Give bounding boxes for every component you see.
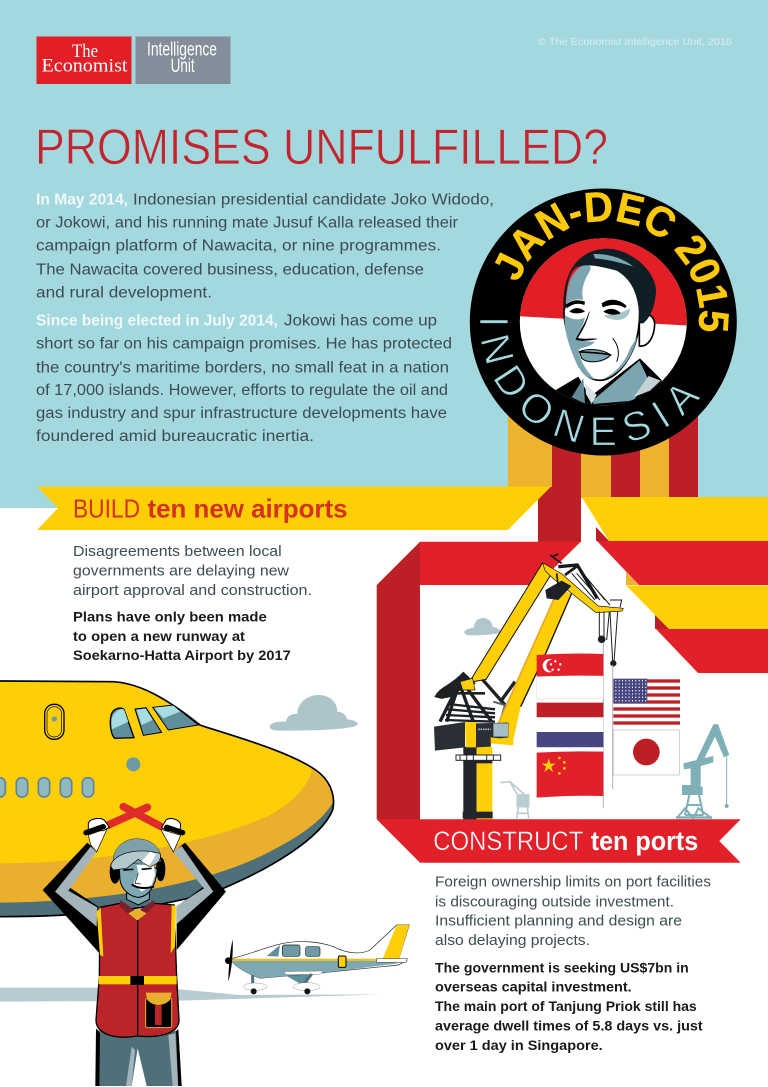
crane column bbox=[456, 747, 501, 820]
logo: The Economist Intelligence Unit: The bbox=[72, 41, 98, 62]
arms bbox=[43, 843, 101, 955]
logo: The Economist Intelligence Unit: Economist bbox=[42, 56, 128, 77]
intro text block: and rural development. bbox=[36, 284, 212, 301]
badge: Jan-Dec 2015 Indonesia portrait: JAN-DEC 2015 bbox=[494, 192, 729, 332]
logo: The Economist Intelligence Unit: Unit bbox=[171, 56, 195, 77]
banner: BUILD ten new airports bbox=[37, 486, 551, 530]
airport text block: Soekarno-Hatta Airport by 2017 bbox=[73, 647, 291, 663]
illustration: port crane, flags and small cranes bbox=[434, 554, 729, 820]
cockpit windows bbox=[110, 708, 134, 738]
crane lattice head bbox=[550, 554, 622, 607]
crane boom arms bbox=[460, 563, 623, 740]
head and hands bbox=[86, 807, 183, 905]
flag: Singapore bbox=[537, 654, 603, 699]
intro text block: campaign platform of Nawacita, or nine programmes. bbox=[36, 238, 441, 255]
safety vest bbox=[96, 903, 179, 1037]
cabin windows bbox=[0, 778, 94, 797]
port frame: red fold bbox=[377, 542, 581, 830]
large yellow airliner bbox=[0, 681, 334, 917]
intro text block: short so far on his campaign promises. He has protected bbox=[36, 335, 452, 352]
port text block: over 1 day in Singapore. bbox=[435, 1037, 603, 1053]
badge: Jan-Dec 2015 Indonesia portrait bbox=[470, 188, 737, 456]
logo: The Economist Intelligence Unit bbox=[36, 36, 230, 84]
intro text block bbox=[36, 191, 494, 445]
neck bbox=[127, 890, 149, 905]
flag: Thailand bbox=[537, 703, 603, 752]
banner: BUILD ten new airports: BUILD bbox=[73, 494, 140, 524]
trousers bbox=[97, 1029, 182, 1086]
vest pocket bbox=[146, 993, 172, 1028]
curved text: JAN-DEC 2015 bbox=[518, 221, 699, 346]
port text block: The main port of Tanjung Priok still has bbox=[435, 998, 697, 1014]
intro text block: the country's maritime borders, no small feat in a nation bbox=[36, 359, 449, 376]
folded stripes: right side bbox=[582, 497, 768, 673]
portrait of Jokowi bbox=[550, 249, 662, 413]
hanging ribbon stripes bbox=[508, 400, 698, 542]
title: PROMISES UNFULFILLED? bbox=[35, 119, 608, 175]
ground shadow bbox=[0, 988, 383, 1002]
logo: The Economist Intelligence Unit: Intelligence bbox=[147, 40, 217, 61]
icon: teal distant crane bbox=[676, 724, 729, 819]
port text block bbox=[435, 875, 711, 1053]
marshaller figure bbox=[43, 807, 226, 1086]
banner: CONSTRUCT ten ports: ten ports bbox=[591, 826, 698, 856]
icon: cloud bbox=[270, 695, 358, 731]
port text block: average dwell times of 5.8 days vs. just bbox=[435, 1018, 703, 1034]
intro text block: Since being elected in July 2014, bbox=[36, 312, 278, 329]
flag: Japan bbox=[613, 730, 679, 775]
port text block: Foreign ownership limits on port facilities bbox=[435, 875, 711, 891]
marshalling sticks bbox=[108, 807, 160, 826]
intro text block: or Jokowi, and his running mate Jusuf Kalla released their bbox=[36, 215, 458, 232]
flag poles bbox=[603, 643, 613, 808]
gloves bbox=[88, 828, 107, 852]
crane lattice and counterweight bbox=[435, 672, 515, 722]
icon: pale distant crane bbox=[501, 782, 529, 818]
banner: BUILD ten new airports: ten new airports bbox=[148, 494, 348, 524]
port text block: The government is seeking US$7bn in bbox=[435, 959, 689, 975]
intro text block: foundered amid bureaucratic inertia. bbox=[36, 428, 314, 445]
port text block: is discouraging outside investment. bbox=[435, 895, 674, 911]
airport text block: Disagreements between local bbox=[73, 544, 282, 560]
curved text: INDONESIA bbox=[480, 316, 699, 445]
airport text block: Plans have only been made bbox=[73, 609, 267, 625]
banner: CONSTRUCT ten ports bbox=[377, 819, 741, 863]
flag: China bbox=[537, 751, 603, 798]
helmet bbox=[113, 839, 161, 865]
airport text block: governments are delaying new bbox=[73, 563, 290, 579]
port text block: overseas capital investment. bbox=[435, 979, 632, 995]
intro text block: gas industry and spur infrastructure developments have bbox=[36, 405, 447, 422]
port crane bbox=[434, 554, 623, 820]
intro text block: Jokowi has come up bbox=[284, 312, 437, 329]
badge: Jan-Dec 2015 Indonesia portrait: INDONESIA bbox=[480, 320, 700, 445]
door bbox=[45, 704, 64, 739]
intro text block: The Nawacita covered business, education, defense bbox=[36, 261, 424, 278]
flag: United States bbox=[613, 679, 680, 725]
crane hoist cables bbox=[598, 612, 618, 666]
intro text block: Indonesian presidential candidate Joko Widodo, bbox=[133, 191, 494, 208]
crane cabin bbox=[434, 722, 513, 751]
intro text block: of 17,000 islands. However, efforts to regulate the oil and bbox=[36, 382, 448, 399]
ear pads bbox=[110, 860, 120, 884]
port text block: Insufficient planning and design are bbox=[435, 914, 682, 930]
airport text block bbox=[73, 544, 312, 663]
airport text block: airport approval and construction. bbox=[73, 583, 312, 599]
small propeller plane bbox=[225, 925, 409, 994]
banner: CONSTRUCT ten ports: CONSTRUCT bbox=[433, 826, 583, 856]
airport text block: to open a new runway at bbox=[73, 628, 245, 644]
copyright note: © The Economist Intelligence Unit, 2016 bbox=[538, 36, 732, 48]
face bbox=[119, 860, 157, 897]
intro text block: In May 2014, bbox=[36, 191, 128, 208]
illustration: airport scene bbox=[0, 681, 409, 1086]
goggles bbox=[111, 851, 160, 870]
port text block: also delaying projects. bbox=[435, 933, 590, 949]
icon: cloud bbox=[464, 618, 501, 635]
